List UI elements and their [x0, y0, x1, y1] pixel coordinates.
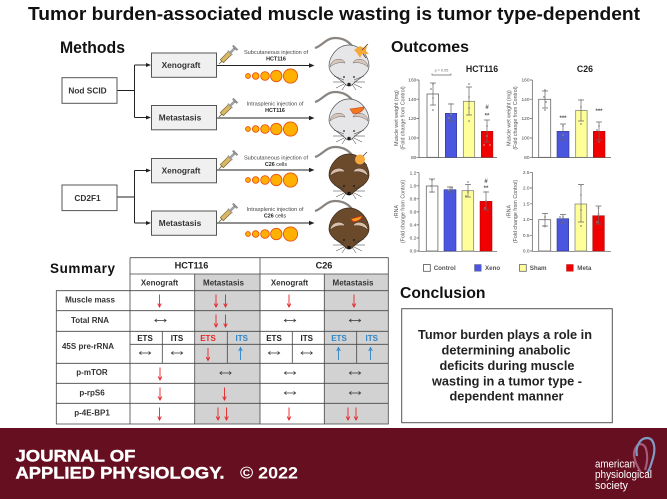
- chart: HCT116 rRNA: 0.2: [410, 236, 417, 242]
- chart: C26 rRNA: [506, 170, 611, 255]
- box: Metastasis HCT116: [152, 106, 216, 130]
- society logo: [595, 438, 654, 492]
- chart: HCT116 muscle wet weight: 100: [408, 136, 417, 142]
- row labels: Muscle mass: [65, 296, 115, 304]
- icon: syringe 4: [217, 203, 238, 224]
- box: Xenograft C26: [152, 158, 216, 183]
- ETS ITS labels: ETS: [266, 334, 282, 343]
- box: Metastasis HCT116: Metastasis: [159, 112, 202, 122]
- injection label 1: HCT116: [266, 56, 286, 62]
- panel: outcomes: [391, 39, 611, 272]
- column headers: Xenograft: [271, 278, 308, 288]
- conclusion box: dependent manner: [450, 390, 564, 404]
- chart: HCT116 muscle wet weight: p = 0.05: [435, 68, 448, 72]
- legend: Meta: [577, 265, 592, 272]
- chart: C26 muscle wet weight: Muscle wet weight (mg): [506, 90, 512, 146]
- box: Nod SCID: [62, 78, 117, 103]
- tumor growth circles 4: [246, 227, 298, 241]
- chart: HCT116 rRNA: 0.4: [410, 223, 417, 229]
- chart: C26 muscle wet weight: (Fold change from Control): [513, 86, 519, 150]
- chart: HCT116 rRNA: 1.0: [410, 184, 417, 190]
- legend: [424, 264, 592, 272]
- chart: C26 rRNA: 0.0: [523, 249, 530, 255]
- journal name: [16, 446, 224, 482]
- column headers: HCT116: [175, 260, 208, 270]
- conclusion box: determining anabolic: [442, 344, 570, 358]
- column headers: Metastasis: [203, 278, 244, 288]
- ETS ITS labels: ITS: [235, 334, 249, 343]
- ETS ITS labels: [137, 334, 379, 343]
- chart: C26 muscle wet weight: 100: [521, 136, 530, 142]
- methods heading: Methods: [60, 39, 125, 57]
- journal name: APPLIED PHYSIOLOGY.: [16, 464, 224, 482]
- arrow: injection 1: [217, 63, 314, 68]
- chart: HCT116 muscle wet weight: [394, 68, 497, 161]
- column headers: Metastasis: [333, 278, 374, 288]
- table shading: [195, 274, 388, 424]
- box: CD2F1: CD2F1: [74, 193, 101, 203]
- row labels: 45S pre-rRNA: [62, 342, 114, 351]
- chart title C26: C26: [577, 64, 593, 74]
- chart: C26 rRNA: 1.0: [523, 217, 530, 223]
- chart: HCT116 rRNA: **: [484, 186, 489, 192]
- ETS ITS labels: ITS: [365, 334, 379, 343]
- injection label 4: C26 cells: [264, 214, 286, 220]
- tumor growth circles 3: [246, 173, 298, 187]
- injection label 2: [247, 102, 304, 114]
- chart: HCT116 rRNA: [394, 170, 497, 255]
- chart: HCT116 rRNA: (Fold change from Control): [400, 180, 406, 243]
- panel: conclusion: [400, 285, 612, 423]
- row labels: p-mTOR: [76, 368, 108, 377]
- injection label 4: Intrasplenic injection of: [247, 207, 304, 213]
- society logo: american: [595, 459, 635, 471]
- chart: C26 muscle wet weight: 160: [521, 78, 530, 84]
- row labels: Total RNA: [71, 316, 109, 325]
- legend: Sham: [530, 265, 547, 272]
- icon: brown mouse with splenic tumor: [315, 201, 369, 253]
- icon: syringe 1: [217, 45, 238, 66]
- box: Metastasis C26: Metastasis: [159, 218, 202, 228]
- chart: C26 rRNA: 0.5: [523, 233, 530, 239]
- injection label 2: HCT116: [265, 108, 285, 114]
- chart: C26 muscle wet weight: 120: [521, 116, 530, 122]
- column headers: Xenograft: [141, 278, 178, 288]
- chart: HCT116 rRNA: 1.2: [410, 170, 417, 176]
- conclusion box: deficits during muscle: [440, 359, 574, 373]
- box: CD2F1: [62, 185, 117, 211]
- table arrows: [139, 294, 372, 420]
- chart: HCT116 rRNA: rRNA: [394, 205, 400, 218]
- chart: HCT116 muscle wet weight: 160: [408, 78, 417, 84]
- box: Xenograft HCT116: [152, 53, 216, 77]
- footer banner: [0, 428, 667, 499]
- chart: C26 muscle wet weight: ***: [559, 116, 567, 122]
- chart: HCT116 muscle wet weight: 120: [408, 116, 417, 122]
- injection label 3: Subcutaneous injection of: [244, 156, 308, 162]
- injection label 3: [244, 156, 308, 168]
- box: Nod SCID: Nod SCID: [68, 86, 107, 96]
- ETS ITS labels: ITS: [300, 334, 314, 343]
- title: Tumor burden-associated muscle wasting is tumor type-dependent: [28, 3, 640, 24]
- chart: HCT116 muscle wet weight: 140: [408, 97, 417, 103]
- box: Metastasis C26: [152, 211, 216, 235]
- journal name: JOURNAL OF: [16, 446, 136, 466]
- injection label 1: Subcutaneous injection of: [244, 50, 308, 56]
- tumor growth circles 1: [246, 69, 298, 83]
- copyright: © 2022: [240, 464, 298, 482]
- chart: C26 rRNA: (Fold change from Control): [513, 180, 519, 243]
- flow connectors HCT116: [117, 63, 151, 120]
- panel: methods: [60, 38, 369, 253]
- outcomes heading: Outcomes: [391, 39, 469, 56]
- table grid: [56, 258, 388, 424]
- box: Xenograft C26: Xenograft: [162, 166, 201, 176]
- conclusion box: [402, 309, 612, 423]
- chart: HCT116 rRNA: 0.8: [410, 196, 417, 202]
- chart: C26 rRNA: rRNA: [506, 205, 512, 218]
- chart: C26 rRNA: 2.5: [523, 170, 530, 176]
- conclusion box: wasting in a tumor type -: [431, 374, 582, 388]
- chart: C26 muscle wet weight: 80: [524, 155, 530, 161]
- chart: HCT116 muscle wet weight: (Fold change from Control): [400, 86, 406, 150]
- chart: HCT116 rRNA: 0.6: [410, 210, 417, 216]
- chart: C26 muscle wet weight: [506, 78, 611, 161]
- legend: Control: [434, 265, 456, 272]
- tumor growth circles 2: [246, 122, 298, 136]
- chart: C26 muscle wet weight: ***: [595, 109, 603, 115]
- ETS ITS labels: ETS: [331, 334, 347, 343]
- conclusion heading: Conclusion: [400, 285, 486, 302]
- chart: C26 muscle wet weight: 140: [521, 97, 530, 103]
- injection label 1: [244, 50, 308, 62]
- chart: C26 rRNA: 1.5: [523, 202, 530, 208]
- icon: white mouse with splenic tumor: [315, 92, 369, 144]
- arrow: injection 2: [217, 116, 314, 120]
- chart: HCT116 muscle wet weight: #: [485, 105, 489, 111]
- summary heading: Summary: [50, 261, 115, 276]
- icon: white mouse with subcutaneous tumor: [315, 38, 369, 90]
- arrow: injection 3: [217, 168, 314, 172]
- society logo: society: [595, 480, 628, 492]
- society logo: physiological: [595, 469, 652, 481]
- injection label 2: Intrasplenic injection of: [247, 102, 304, 108]
- chart: HCT116 rRNA: 0.0: [410, 249, 417, 255]
- row labels: [62, 296, 115, 418]
- row labels: p-4E-BP1: [74, 408, 110, 418]
- ETS ITS labels: ETS: [137, 334, 153, 343]
- chart: HCT116 rRNA: #: [484, 179, 488, 185]
- chart: HCT116 muscle wet weight: **: [485, 114, 490, 120]
- row labels: p-rpS6: [79, 388, 105, 398]
- panel: summary table: [50, 258, 388, 424]
- chart: HCT116 muscle wet weight: Muscle wet weight (mg): [394, 90, 400, 146]
- ETS ITS labels: ITS: [171, 334, 184, 343]
- chart: C26 rRNA: 2.0: [523, 186, 530, 192]
- chart: HCT116 muscle wet weight: 80: [411, 155, 417, 161]
- ETS ITS labels: ETS: [200, 334, 216, 343]
- box: Xenograft HCT116: Xenograft: [162, 60, 201, 70]
- injection label 3: C26 cells: [265, 162, 287, 168]
- column headers: [141, 260, 374, 288]
- icon: brown mouse with subcutaneous tumor: [315, 147, 369, 199]
- flow connectors C26: [117, 168, 151, 225]
- conclusion box: Tumor burden plays a role in: [418, 328, 592, 342]
- chart title HCT116: HCT116: [466, 64, 498, 74]
- column headers: C26: [316, 260, 332, 270]
- injection label 4: [247, 207, 304, 220]
- arrow: injection 4: [217, 221, 314, 225]
- icon: syringe 2: [217, 98, 238, 119]
- icon: syringe 3: [217, 150, 238, 171]
- legend: Xeno: [485, 265, 500, 272]
